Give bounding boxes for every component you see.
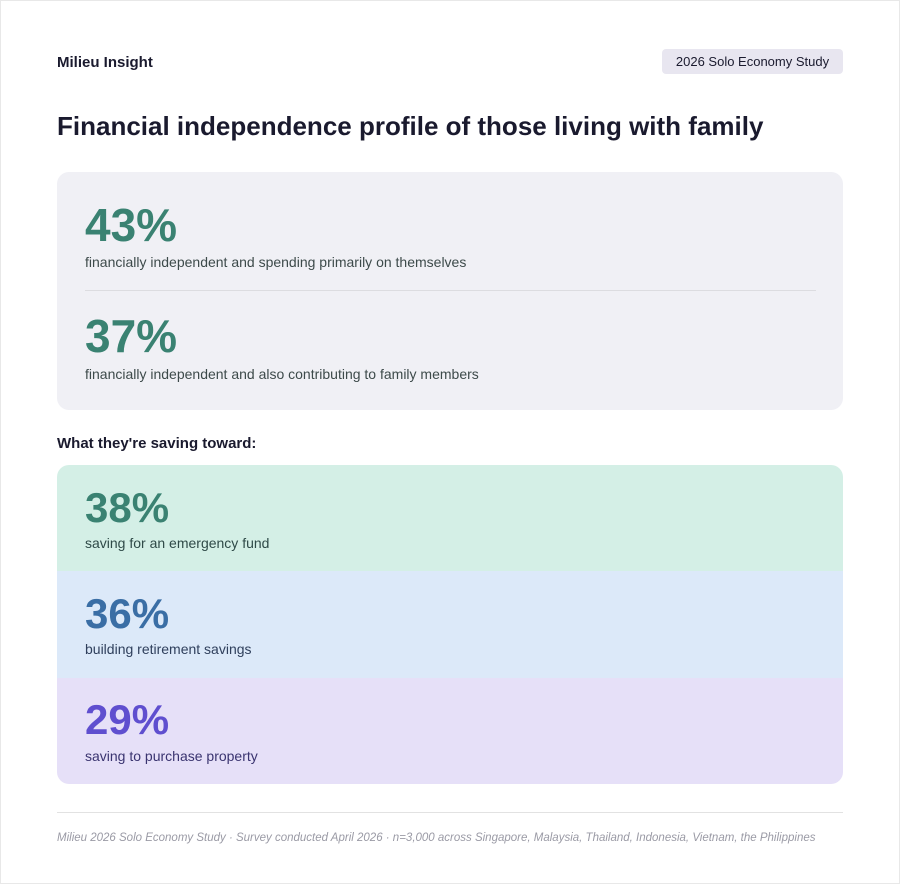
stat: 36%: 36% xyxy=(85,590,169,637)
stat: 38%: 38% xyxy=(85,484,169,531)
label: contributing to family: financially independent and also contributing to family members xyxy=(85,366,479,382)
study badge: 2026 Solo Economy Study xyxy=(676,54,829,69)
stat: 43%: 43% xyxy=(85,199,177,251)
title: Financial independence profile of those living with family xyxy=(57,111,763,141)
row: property xyxy=(57,678,843,784)
label: spending on themselves: financially independent and spending primarily on themselves xyxy=(85,254,466,270)
study badge xyxy=(662,49,843,74)
label: retirement: building retirement savings xyxy=(85,641,252,657)
label: emergency fund: saving for an emergency fund xyxy=(85,535,269,551)
panel: saving goals xyxy=(57,465,843,784)
panel: financial independence xyxy=(57,172,843,410)
stat: 29%: 29% xyxy=(85,696,169,743)
stat: 37%: 37% xyxy=(85,310,177,362)
footer source note: Milieu 2026 Solo Economy Study · Survey conducted April 2026 · n=3,000 across Singapore, Malaysia, Thailand, Indonesia, Vietnam, the Philippines xyxy=(57,832,815,844)
row: emergency fund xyxy=(57,465,843,571)
row: retirement xyxy=(57,571,843,678)
subheading: What they're saving toward: xyxy=(57,435,256,452)
brand name: Milieu Insight xyxy=(57,54,153,71)
label: property: saving to purchase property xyxy=(85,748,258,764)
